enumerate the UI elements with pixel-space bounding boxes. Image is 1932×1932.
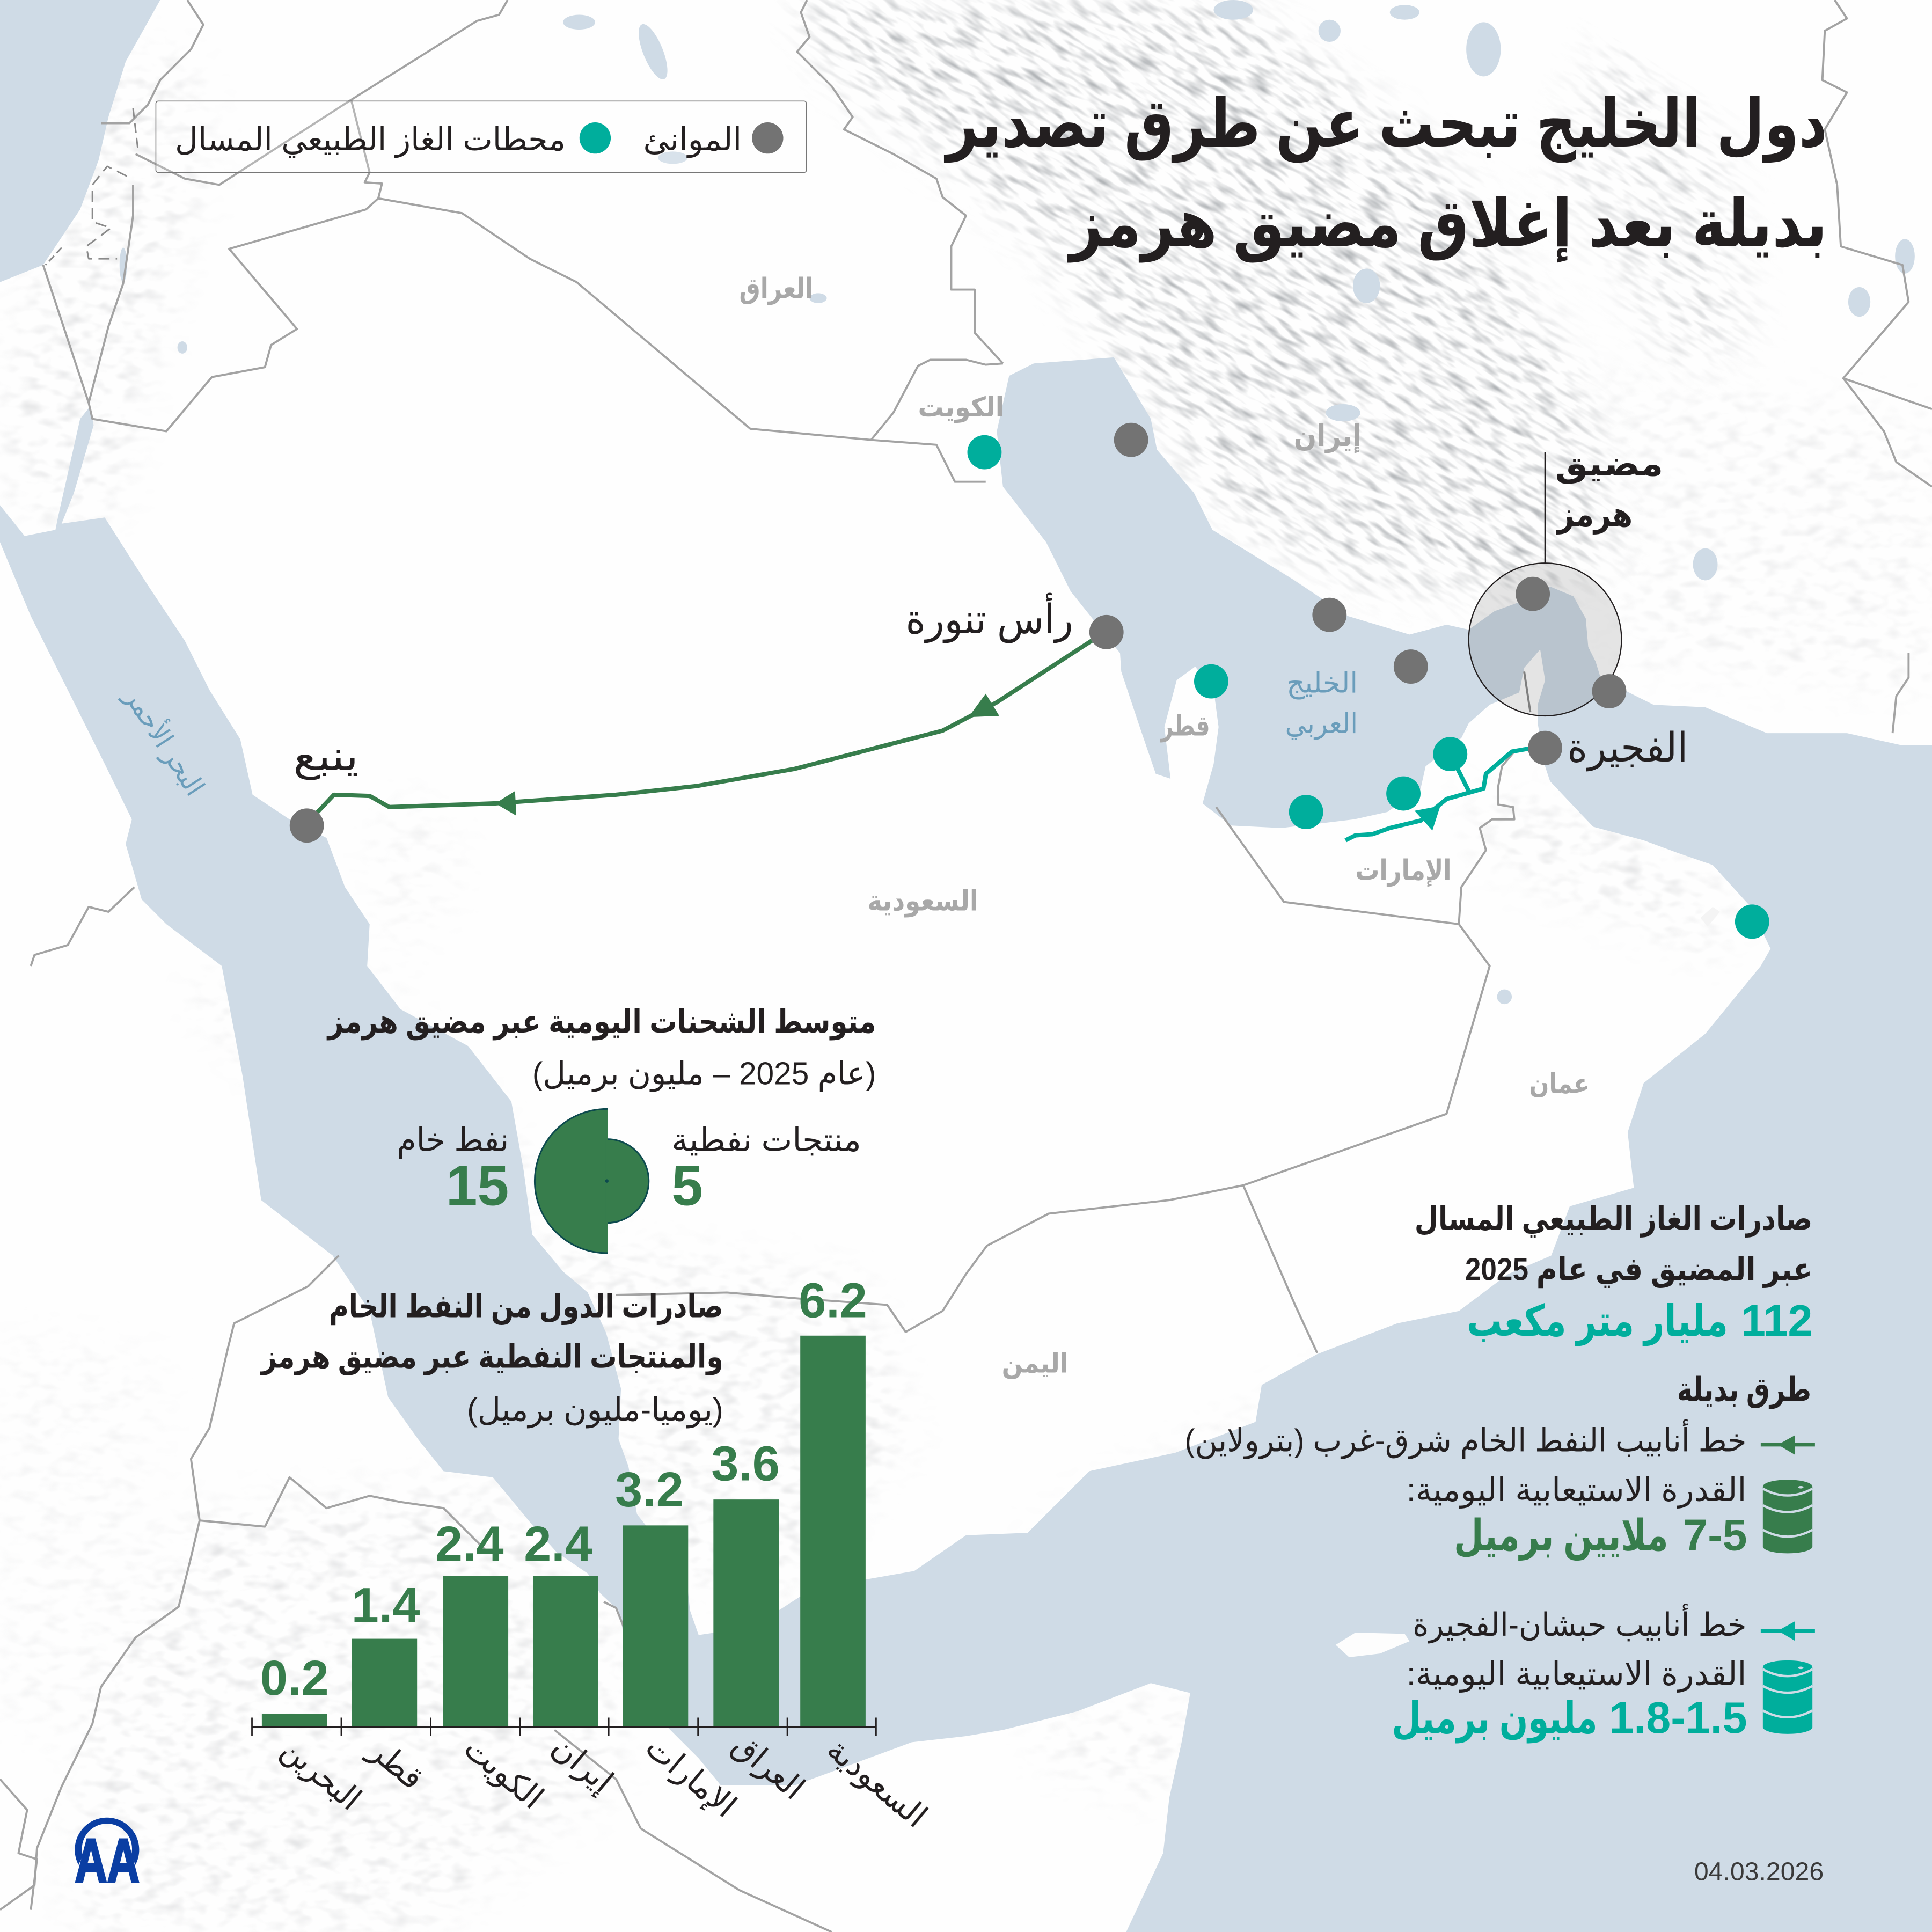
- country labels: [740, 273, 1590, 1380]
- LNG exports block: عبر المضيق في عام 2025: [1465, 1251, 1812, 1288]
- terrain shading: Zagros mountains: [794, 0, 1763, 603]
- legend: ports dot: [752, 122, 784, 153]
- legend: LNG dot: [580, 122, 611, 153]
- alternative routes heading: طرق بديلة: [1677, 1371, 1811, 1409]
- bar values: 2.4: [524, 1517, 592, 1571]
- country labels: اليمن: [1002, 1348, 1069, 1380]
- logo: Anadolu Agency: [75, 1818, 140, 1896]
- sea labels: العربي: [1285, 708, 1358, 740]
- sea labels: الخليج: [1286, 667, 1358, 699]
- bar values: 3.6: [711, 1437, 780, 1491]
- country labels: إيران: [1294, 419, 1362, 453]
- icon: green barrel: [1763, 1480, 1812, 1553]
- Strait of Hormuz label: [1555, 444, 1663, 535]
- country axis labels: العراق: [726, 1726, 811, 1807]
- country axis labels: الإمارات: [638, 1729, 743, 1825]
- Strait of Hormuz circle: [1469, 452, 1621, 716]
- crude oil value: 15: [446, 1154, 509, 1217]
- city labels: [293, 592, 1688, 780]
- Habshan-Fujairah pipeline: [1345, 749, 1529, 840]
- sea labels: البحر الأحمر: [118, 681, 211, 802]
- bar chart heading: [260, 1288, 723, 1429]
- lakes and islands: [120, 0, 1915, 1657]
- LNG exports block: [1415, 1201, 1812, 1346]
- bar values: 6.2: [799, 1273, 867, 1328]
- oil products value: منتجات نفطية: [671, 1122, 861, 1158]
- country axis labels: [274, 1726, 934, 1835]
- average daily shipments heading: [326, 1004, 876, 1092]
- Strait of Hormuz label: هرمز: [1556, 495, 1633, 535]
- bar chart: exports by country: [252, 1273, 934, 1835]
- legend: [156, 101, 807, 172]
- legend: LNG label: محطات الغاز الطبيعي المسال: [175, 121, 566, 158]
- city labels: الفجيرة: [1567, 725, 1688, 772]
- bar chart heading: (يوميا-مليون برميل): [467, 1392, 723, 1429]
- route 2: Habshan-Fujairah: خط أنابيب حبشان-الفجيرة: [1413, 1604, 1746, 1644]
- country labels: عمان: [1529, 1068, 1590, 1099]
- country labels: قطر: [1159, 711, 1210, 743]
- average daily shipments heading: (عام 2025 – مليون برميل): [532, 1055, 876, 1092]
- route 2: Habshan-Fujairah: القدرة الاستيعابية اليومية:: [1407, 1656, 1746, 1693]
- Strait of Hormuz label: مضيق: [1555, 444, 1663, 484]
- icon: teal barrel: [1763, 1660, 1812, 1734]
- bar values: 3.2: [615, 1462, 684, 1517]
- route 1: Petroline: 7-5: [1683, 1510, 1747, 1560]
- bar chart heading: صادرات الدول من النفط الخام: [329, 1288, 723, 1325]
- bar values: 2.4: [435, 1517, 504, 1571]
- crude oil value: نفط خام: [397, 1122, 509, 1158]
- country labels: السعودية: [867, 885, 978, 918]
- semicircle chart: crude vs products: [535, 1109, 649, 1253]
- arrowhead: [1415, 806, 1440, 830]
- bar values: 1.4: [352, 1578, 420, 1633]
- legend arrow: teal: [1761, 1621, 1815, 1641]
- country axis labels: السعودية: [819, 1731, 934, 1835]
- city labels: رأس تنورة: [906, 592, 1073, 643]
- port markers: [290, 423, 1626, 843]
- LNG terminal markers: [968, 435, 1769, 939]
- axis: [252, 1718, 876, 1736]
- route 2: Habshan-Fujairah: 1.8-1.5: [1609, 1693, 1747, 1743]
- country labels: الكويت: [918, 392, 1004, 423]
- country axis labels: الكويت: [457, 1730, 550, 1817]
- title: بديلة بعد إغلاق مضيق هرمز: [1067, 187, 1827, 263]
- country axis labels: قطر: [361, 1731, 430, 1797]
- arrowhead: [495, 791, 516, 816]
- LNG exports block: مليار متر مكعب: [1467, 1297, 1728, 1346]
- logo: Anadolu Agency: AA: [75, 1827, 140, 1896]
- country labels: العراق: [740, 273, 813, 305]
- route 1: Petroline: ملايين برميل: [1454, 1511, 1668, 1561]
- bar values: 0.2: [260, 1651, 329, 1706]
- legend: ports label: الموانئ: [643, 121, 742, 158]
- route 2: Habshan-Fujairah: مليون برميل: [1392, 1694, 1598, 1744]
- LNG exports block: 112: [1741, 1296, 1812, 1345]
- route 1: Petroline: [1185, 1419, 1815, 1561]
- title: [943, 87, 1827, 263]
- country labels: الإمارات: [1356, 854, 1452, 887]
- oil products value: [671, 1122, 861, 1217]
- country axis labels: إيران: [545, 1729, 620, 1801]
- route 1: Petroline: القدرة الاستيعابية اليومية:: [1407, 1472, 1746, 1509]
- LNG exports block: صادرات الغاز الطبيعي المسال: [1415, 1201, 1812, 1238]
- average daily shipments heading: متوسط الشحنات اليومية عبر مضيق هرمز: [326, 1004, 876, 1041]
- bar chart heading: والمنتجات النفطية عبر مضيق هرمز: [260, 1338, 723, 1375]
- crude oil value: [397, 1122, 509, 1217]
- legend arrow: green: [1761, 1436, 1815, 1454]
- East-West pipeline (Petroline): [314, 641, 1092, 816]
- country axis labels: البحرين: [274, 1731, 368, 1818]
- bar values: [260, 1273, 867, 1706]
- route 1: Petroline: خط أنابيب النفط الخام شرق-غرب (بترولاين): [1185, 1419, 1746, 1460]
- city labels: ينبع: [293, 734, 358, 780]
- oil products value: 5: [671, 1154, 703, 1217]
- bars: [262, 1336, 866, 1727]
- route 2: Habshan-Fujairah: [1392, 1604, 1815, 1744]
- arrowhead: [969, 694, 999, 717]
- date: 04.03.2026: [1694, 1857, 1824, 1886]
- sea labels: [118, 667, 1358, 802]
